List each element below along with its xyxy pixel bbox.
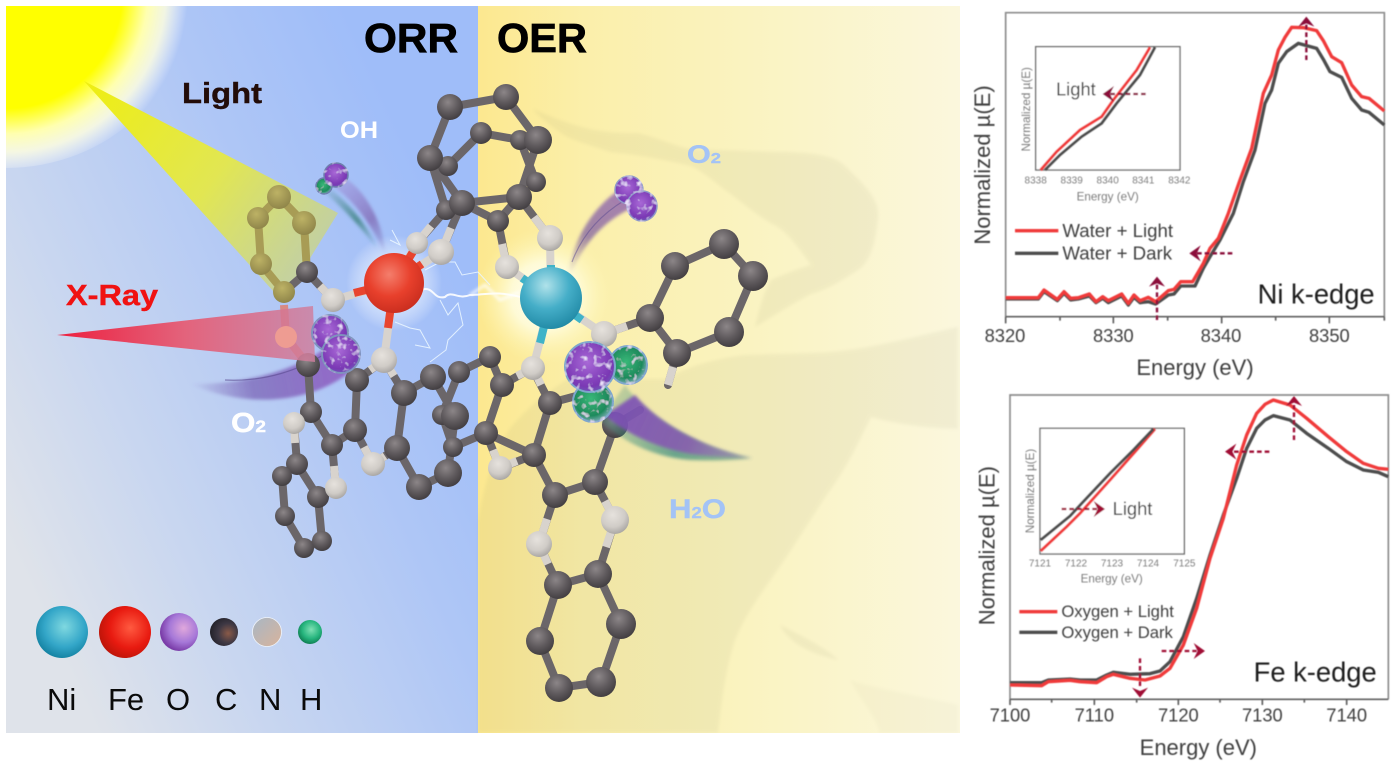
arrowheads [1149,17,1314,287]
legend: Oxygen + Dark [1061,623,1174,642]
inset plot: 7122 [1065,558,1088,569]
heading: OER: OER [497,15,587,61]
legend: Oxygen + Light [1061,602,1174,621]
water splash [478,109,958,733]
glow: Ni site [484,239,599,354]
inset plot: 7125 [1173,558,1196,569]
glow: Fe site [350,238,438,328]
background: ORR side [6,6,478,733]
comet trail: H2O [600,385,752,460]
inset plot: Energy (eV) [1081,573,1143,586]
background: OER side [478,6,960,733]
sun [6,6,185,168]
x axis title: Energy (eV) [1140,735,1257,760]
carbon atoms [272,84,768,702]
tick labels: 8320 [985,325,1025,346]
tick labels: 8350 [1309,325,1350,346]
bonds: ring under light beam [258,197,307,292]
curve: oxygen + light [1010,400,1388,686]
curve: water + light [1006,27,1384,303]
inset plot: Normalized µ(E) [1020,67,1033,152]
y axis title: Normalized µ(E) [970,85,995,245]
tick labels: 7110 [1075,705,1114,726]
carbon atoms under light beam [247,185,316,303]
label: OH: OH [340,117,378,144]
tick labels: 7140 [1326,705,1367,726]
label: Light: Light [182,78,262,110]
sphere: Fe [99,606,151,658]
sphere: N [252,618,282,646]
comet trail: OH [326,180,384,248]
y axis title: Normalized µ(E) [975,466,1000,625]
nitrogen atom under X-ray beam [275,326,297,348]
legend: element labels: O [166,682,190,717]
sphere: H [298,620,322,644]
inset plot: 8340 [1097,175,1119,186]
inset plot: 7124 [1137,558,1160,569]
tick labels [985,325,1350,346]
plot frame [1006,13,1384,323]
atom: iron centre [364,253,424,313]
legend: element labels [47,682,322,717]
heading: ORR: ORR [364,15,458,61]
x axis title: Energy (eV) [1136,355,1254,380]
label: H2O: H2O [669,494,726,524]
tick labels: 8340 [1201,325,1241,346]
inset plot: 8342 [1168,175,1191,186]
curve: oxygen + dark [1010,416,1388,683]
label: O2 white: O2 [231,407,266,438]
label: O2 blue: O 2 [687,141,721,169]
comet trail: O2 (OER) [569,191,628,270]
chart: Ni k-edge XANES [970,13,1384,380]
molecule: OH [316,163,348,194]
panel: catalyst illustration [0,0,960,733]
X-ray beam [57,306,315,362]
bonds: ring under X-ray beam [284,305,308,365]
lightning between Fe and Ni [390,230,525,362]
bonds: carbon skeleton [282,97,753,688]
light beam [84,81,338,302]
label: X-Ray: X-Ray [66,280,158,312]
tick labels: 7120 [1158,705,1199,726]
nitrogen atoms [283,225,629,557]
tick labels: 7130 [1242,705,1283,726]
legend [1015,220,1174,264]
comet trail: O2 (ORR) [199,350,348,402]
legend: element labels: Ni [47,682,76,717]
edge label: Ni k-edge [1258,278,1375,309]
inset plot: Light [1056,79,1096,100]
atom: nickel centre [520,267,582,329]
chart: Fe k-edge XANES [975,395,1388,760]
edge label: Fe k-edge [1254,657,1377,688]
inset plot [1024,428,1196,586]
molecule: H2O [565,342,647,422]
inset plot [1020,47,1191,204]
legend: element labels: C [215,682,237,717]
bond stubs: iron [354,250,422,328]
inset plot: 7123 [1101,558,1124,569]
tick labels [990,705,1367,726]
tick labels: 8330 [1093,325,1134,346]
arrowheads [1132,396,1302,698]
inset plot: Normalized µ(E) [1024,449,1037,533]
arrows [1157,23,1306,320]
legend: element labels: N [259,682,281,717]
arrows [1140,405,1294,688]
inset plot: 8339 [1061,175,1083,186]
legend: Water + Dark [1062,243,1173,264]
plot frame [1010,395,1388,705]
molecule: O2 (OER) [615,176,657,221]
legend: element labels: H [300,682,322,717]
molecule: O2 (ORR) [312,315,360,373]
legend [1019,602,1174,642]
legend: element labels: Fe [108,682,144,717]
inset plot: 8341 [1132,175,1155,186]
inset plot: Light [1113,498,1152,519]
energy glow at centre [350,238,599,354]
inset plot: Energy (eV) [1077,191,1139,204]
sphere: C [210,618,238,646]
curve: water + dark [1006,43,1384,305]
sphere: O [160,613,198,651]
legend: Water + Light [1062,220,1174,241]
inset plot: 8338 [1025,175,1047,186]
legend: element spheres [36,606,322,658]
sphere: Ni [36,606,88,658]
bond stubs: nickel [522,265,582,343]
tick labels: 7100 [990,705,1030,726]
bonds: nitrogen-side halves [294,217,673,564]
inset plot: 7121 [1029,558,1052,569]
